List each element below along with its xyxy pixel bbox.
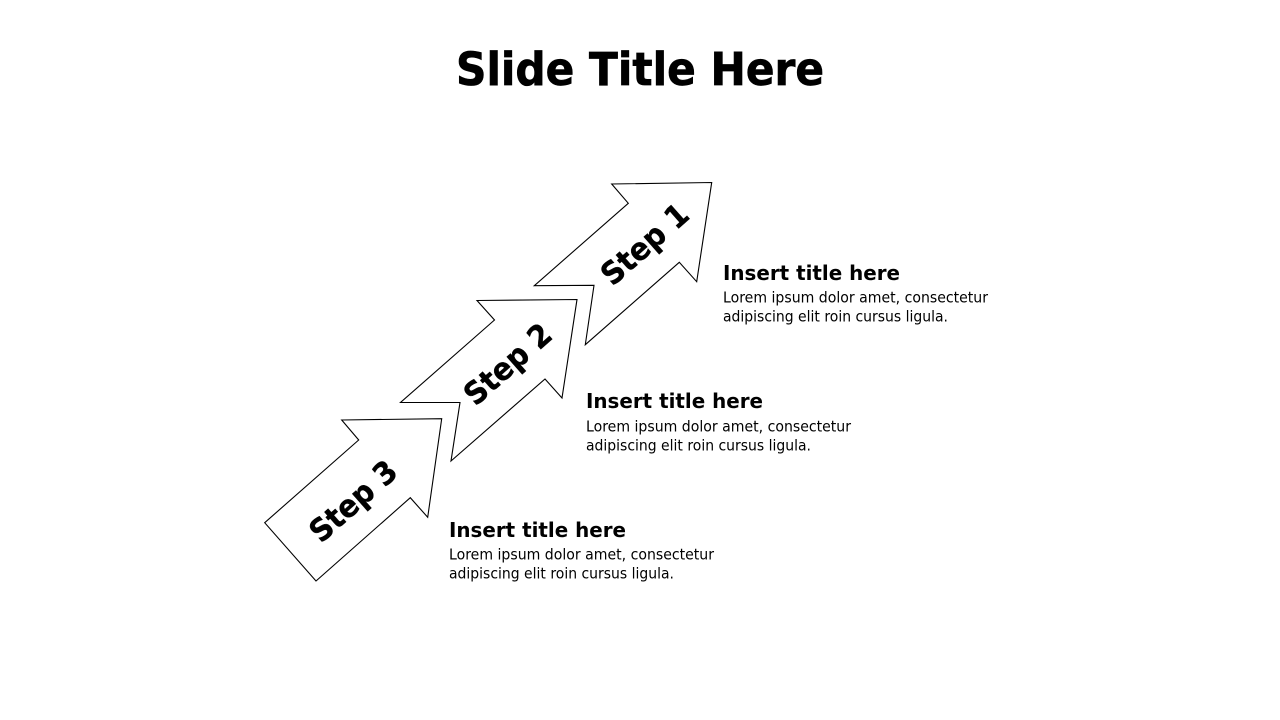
text block: step 3: Lorem ipsum dolor amet, consectetur <box>449 546 715 564</box>
text block: step 1: adipiscing elit roin cursus ligula. <box>723 308 948 326</box>
arrow: step 2 <box>400 300 577 461</box>
arrow: step 1: Step 1 <box>594 196 696 293</box>
arrow: step 3: Step 3 <box>302 453 405 550</box>
text block: step 2: Lorem ipsum dolor amet, consectetur <box>586 418 852 436</box>
text block: step 1 <box>723 261 989 326</box>
text block: step 2: Insert title here <box>586 389 763 413</box>
text block: step 1: Insert title here <box>723 261 900 285</box>
text block: step 2: adipiscing elit roin cursus ligula. <box>586 436 811 454</box>
text block: step 3: Insert title here <box>449 518 626 542</box>
arrow: step 1 <box>534 182 712 345</box>
arrow: step 3 <box>265 419 442 581</box>
text block: step 2 <box>586 389 852 454</box>
text block: step 3: adipiscing elit roin cursus ligula. <box>449 564 674 582</box>
text block: step 1: Lorem ipsum dolor amet, consectetur <box>723 288 989 306</box>
text block: step 3 <box>449 518 715 582</box>
title: Slide Title Here <box>456 43 824 96</box>
arrow: step 2: Step 2 <box>457 316 559 413</box>
